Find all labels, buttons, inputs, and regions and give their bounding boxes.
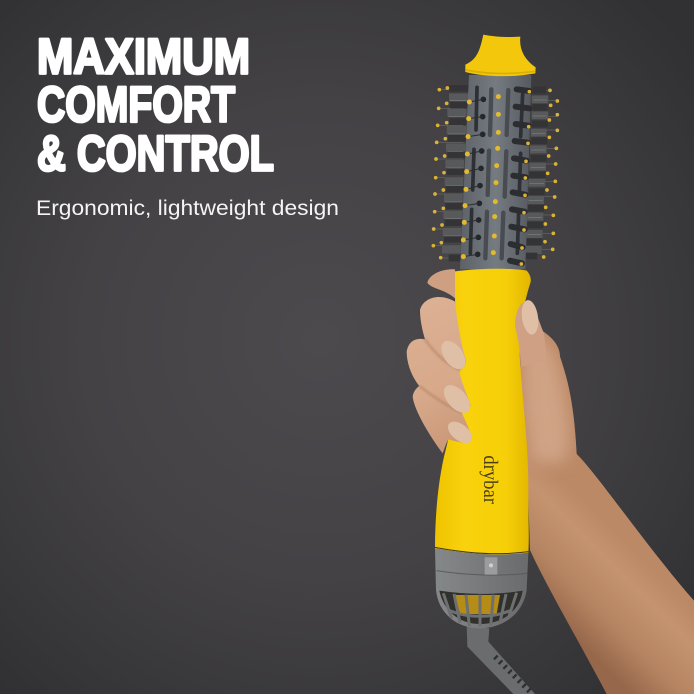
barrel (460, 75, 531, 269)
brand name: drybar (479, 455, 501, 504)
dryer base (435, 547, 528, 628)
barrel slots (470, 87, 523, 253)
title: & CONTROL (37, 126, 274, 182)
title (37, 28, 274, 182)
subtitle: Ergonomic, lightweight design (36, 196, 339, 220)
bristle sockets (478, 99, 483, 254)
connector pins (463, 99, 483, 257)
yellow top cap (465, 35, 536, 76)
finger creases (419, 339, 462, 413)
fingernails (437, 299, 540, 447)
dryer handle (435, 269, 531, 555)
cord (467, 625, 535, 694)
title: MAXIMUM (37, 28, 250, 84)
right bristles (522, 90, 557, 256)
left bristles (433, 88, 473, 258)
yellow bristle tips (463, 97, 498, 257)
gripping fingers (407, 297, 472, 453)
arm and palm (515, 301, 694, 694)
thumb over handle (515, 301, 547, 367)
top finger (427, 269, 455, 298)
brush head (433, 35, 557, 269)
front right pins (510, 89, 529, 263)
palm highlight (522, 328, 569, 464)
hand, arm and dryer body (407, 269, 694, 694)
title: COMFORT (37, 76, 235, 132)
